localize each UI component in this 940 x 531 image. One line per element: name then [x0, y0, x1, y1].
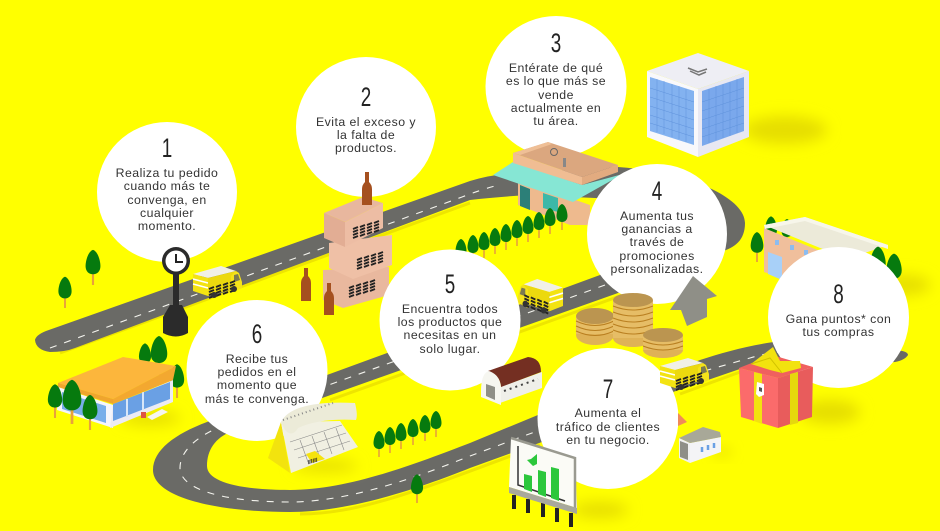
- building: small house with orange roof: [678, 413, 732, 463]
- step 3 circle: tu área.: [533, 114, 579, 128]
- step 5 circle: necesitas en un: [404, 328, 496, 342]
- step 4 circle: personalizadas.: [611, 262, 703, 276]
- step 8 circle: 8: [833, 279, 844, 309]
- step 3 circle: es lo que más se: [506, 74, 606, 88]
- step 2 circle: productos.: [335, 141, 397, 155]
- tree row by the curve: [374, 411, 442, 503]
- step 5 circle: solo lugar.: [419, 342, 481, 356]
- road truck on the lower road: [660, 358, 709, 390]
- building: blue office tower: [647, 53, 827, 157]
- step 1 circle: [97, 122, 237, 262]
- step 3 circle: 3: [551, 28, 561, 58]
- building: teal awning shop: [493, 142, 623, 225]
- road shadows: [60, 203, 740, 514]
- step 8 circle: tus compras: [803, 325, 874, 339]
- step 1 circle: momento.: [138, 219, 196, 233]
- step 5 circle: 5: [445, 269, 455, 299]
- step 6 circle: [186, 300, 328, 441]
- icon: billboard chart: [509, 438, 628, 527]
- step 4 circle: promociones: [619, 249, 695, 263]
- step 2 circle: [296, 57, 436, 197]
- step 1 circle: Realiza tu pedido: [116, 166, 218, 180]
- step 2 circle: la falta de: [337, 128, 395, 142]
- icon: stacked crates: [323, 172, 392, 315]
- icon: gift box: [739, 347, 860, 428]
- step 6 circle: 6: [252, 319, 262, 349]
- step 1 circle: cualquier: [140, 206, 194, 220]
- step 4 circle: ganancias a: [621, 222, 693, 236]
- step 7 circle: [538, 348, 678, 489]
- step 2 circle: 2: [361, 82, 371, 112]
- step 4 circle: [587, 164, 727, 304]
- bottle beside crates: [301, 268, 311, 301]
- step 4 circle: través de: [630, 235, 684, 249]
- step 2 circle: Evita el exceso y: [316, 115, 416, 129]
- building: hotel behind step 8: [751, 216, 930, 300]
- step 5 circle: [380, 250, 520, 390]
- step 6 circle: más te convenga.: [205, 392, 309, 406]
- step 5 circle: Encuentra todos: [402, 302, 498, 316]
- road: [35, 167, 908, 512]
- step 6 circle: Recibe tus: [226, 352, 288, 366]
- step 7 circle: tráfico de clientes: [556, 420, 660, 434]
- step 8 circle: [768, 247, 909, 388]
- step 1 circle: convenga, en: [127, 193, 207, 207]
- step 3 circle: Entérate de qué: [509, 61, 603, 75]
- step 6 circle: pedidos en el: [217, 365, 297, 379]
- step 4 circle: 4: [652, 176, 662, 206]
- icon: gold coins: [576, 293, 683, 358]
- step 7 circle: 7: [603, 374, 613, 404]
- step 5 circle: los productos que: [398, 315, 502, 329]
- step 8 circle: Gana puntos* con: [786, 312, 891, 326]
- step 7 circle: en tu negocio.: [566, 433, 650, 447]
- road truck on the upper road: [193, 266, 242, 298]
- step 3 circle: actualmente en: [511, 101, 601, 115]
- step 4 circle: Aumenta tus: [620, 209, 694, 223]
- building: orange roof store: [48, 336, 184, 430]
- building: barn: [481, 357, 542, 405]
- tree row by the shop: [456, 204, 568, 265]
- icon: clock post: [162, 247, 190, 336]
- step 6 circle: momento que: [217, 378, 297, 392]
- step 1 circle: 1: [162, 133, 172, 163]
- step 3 circle: [486, 16, 626, 157]
- step 1 circle: cuando más te: [124, 179, 210, 193]
- step 7 circle: Aumenta el: [575, 406, 641, 420]
- trees on the left: [58, 250, 100, 308]
- icon: calendar: [268, 403, 358, 473]
- road truck on the middle road: [518, 279, 563, 314]
- icon: up arrow: [670, 276, 717, 326]
- step 3 circle: vende: [538, 88, 574, 102]
